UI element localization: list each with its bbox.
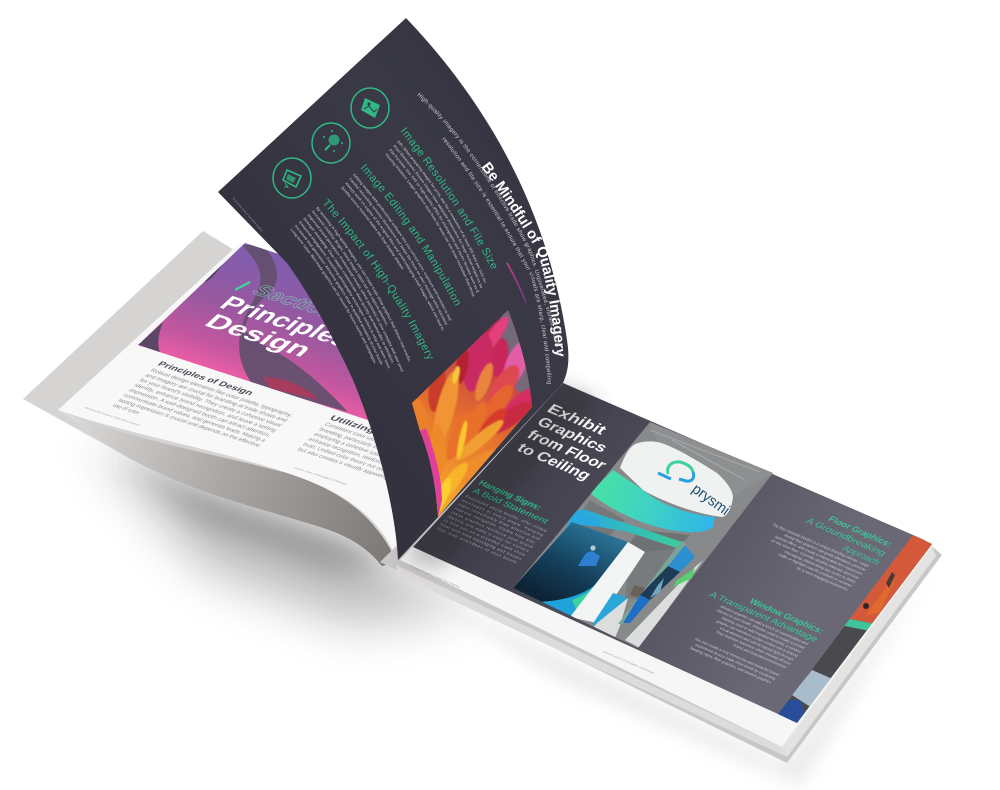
footer: left page: [83, 406, 349, 486]
green floor accent: [673, 568, 695, 587]
title: exhibit graphics: to Ceiling: [513, 440, 595, 483]
heading: floor graphics: Approach: [840, 544, 882, 566]
back wall: [625, 548, 678, 600]
page stack: left: [58, 410, 397, 566]
body: image editing: Quality source material makes the final display sharper.: [342, 186, 404, 270]
store photo: exhibit booth: [513, 422, 773, 648]
section title: Design: [199, 310, 318, 361]
section label: Section: [247, 281, 344, 323]
blue counter: [592, 593, 627, 625]
curled sheet: [218, 18, 568, 560]
book cover: right board: [380, 385, 942, 763]
body: principles of design: for your brand's visibility. They create a cohesive visual: [138, 378, 283, 428]
body: utilizing color: but also creates a visually appealing and: [296, 447, 401, 484]
icon: monitor: [273, 158, 311, 198]
footer: right page: The Essential Guide to Trade Show Graphics: [408, 564, 462, 589]
heading: hanging signs: Hanging Signs:: [477, 478, 544, 512]
body: hanging signs: [436, 494, 549, 565]
heading: hanging signs: [471, 478, 552, 526]
body: principles of design: use of color.: [111, 403, 142, 416]
footer: curled page: The Essential Guide to Trade Show Graphics: [231, 196, 264, 233]
dark colour panel: [413, 383, 913, 714]
body: principles of design: communicate brand values, and generate leads. Making a: [122, 393, 267, 443]
body: utilizing color: Consistent color usage is essential for effective: [323, 422, 444, 465]
pink accent rule: [507, 263, 526, 303]
body: window graphics: graphic can transform a plain surface into a striking: [715, 619, 799, 658]
intro paragraph: High-quality imagery is the cornerstone of effective trade show graphics. Unpixelated, vibrant visuals attract attendees and: [417, 92, 562, 355]
teal arch band: [590, 470, 715, 532]
heading: floor graphics: [804, 514, 894, 566]
body: floor graphics: for a more engaging experience.: [796, 566, 850, 592]
body: image resolution: DPI: When preparing images for print, aim for a resolution of at least 300 dots per inch for sharp results at close range.: [397, 140, 486, 282]
body: impact of imagery: Increased lead generation: Attractive graphics draw in qualified prospects at your booth.: [294, 224, 382, 366]
body: hanging signs: these graphics reinforce your brand: [450, 510, 534, 549]
page stack: right: [396, 565, 787, 757]
body: floor graphics: messaging, placed along key routes to direct: [783, 549, 858, 584]
icon: picture: [351, 88, 389, 128]
body: window graphics: meeting room or add branded elements, a window: [720, 616, 803, 654]
heading: impact of imagery: The Impact of High-Quality Imagery: [324, 198, 433, 359]
body: window graphics: brand and branded environments.: [732, 643, 789, 670]
panel: right page: [400, 383, 940, 747]
body: principles of design: and imagery are crucial for branding at trade shows and: [143, 373, 288, 423]
heading: hanging signs: A Bold Statement: [471, 486, 552, 526]
body: floor graphics: traffic or highlight specific products or services: [777, 552, 854, 588]
footer: right page: prysm.com | Principles of Design: [602, 650, 656, 675]
body: hanging signs: improve navigation. Visible from afar,: [454, 506, 538, 545]
body: utilizing color: branding, particularly in trade shows. By: [317, 427, 421, 464]
panel: curled page: [218, 18, 568, 560]
soft shadow cast by curled page: [400, 383, 600, 570]
heading: floor graphics: Floor Graphics:: [826, 514, 894, 548]
logo wordmark: prysmi: [689, 480, 733, 519]
section title: Principles of: [214, 292, 392, 362]
body: window graphics: experience at your trade show booth by combining: [694, 642, 777, 681]
body: floor graphics: [770, 522, 871, 592]
title: exhibit graphics: [513, 401, 611, 483]
body: principles of design: lasting impression is crucial and depends on the effective: [116, 398, 262, 448]
body: impact of imagery: By investing in high-quality imagery, you can create trade show graphics that deliver real results:: [316, 206, 410, 362]
body: floor graphics: special offers, and create a memorable first impression: [774, 534, 864, 576]
body: floor graphics: on the show floor. Consider durable materials and clear: [770, 538, 861, 580]
right booth panel: [668, 545, 695, 572]
heading: window graphics: Window Graphics:: [747, 597, 826, 635]
intro paragraph: resolution and file size is essential to ensure that your visuals are sharp, clear and compelling at any size.: [442, 137, 552, 384]
body: window graphics: interest to your booth. Whether used to create a private: [716, 608, 806, 650]
body: hanging signs: messages at every angle. Hanging: [461, 498, 545, 537]
intro paragraph: [417, 92, 562, 384]
body: window graphics: Window graphics can add a touch of sophistication and: [719, 604, 810, 646]
book cover: left board: [23, 231, 420, 566]
white page sheet: [58, 243, 420, 560]
title: exhibit graphics: from Floor: [523, 427, 610, 473]
body: principles of design: identity, enhance brand recognition, and leave a lasting: [132, 383, 277, 433]
booth post: [620, 542, 685, 623]
body: hanging signs: signs immediately draw attention and: [457, 502, 541, 541]
heading: principles of design: Principles of Design: [156, 360, 256, 397]
body: window graphics: You can create a truly immersive and impactful brand: [693, 637, 781, 677]
drop shadow under book: [90, 440, 930, 785]
dark swirl shape: [239, 245, 348, 412]
panel: left page: [58, 243, 396, 550]
body: utilizing color: [296, 422, 444, 484]
icon: magnifier: [312, 123, 350, 163]
heading: image resolution: Image Resolution and File Size: [400, 127, 496, 269]
body: hanging signs: to find you on a crowded trade show: [443, 518, 527, 557]
photo: flower: [412, 310, 532, 517]
body: window graphics: They maintain openness while showing off your: [714, 629, 793, 666]
body: impact of imagery: Long-term value: Well-made graphics can be reused for future events and campaigns.: [290, 228, 376, 364]
body: principles of design: [111, 368, 294, 448]
body: window graphics: visual element and still let natural light through.: [719, 626, 796, 662]
body: principles of design: impression. A well-designed booth can attract attention,: [127, 388, 272, 438]
body: utilizing color: enhance recognition, reinforce their identity and: [306, 437, 429, 480]
body: window graphics: [689, 604, 810, 685]
booth top frame: [572, 509, 685, 548]
logo mark: [658, 462, 694, 481]
photo strip: orange vehicle and window: [778, 535, 932, 723]
wave graphic: [541, 585, 595, 616]
pink strip beside flower: [420, 428, 442, 517]
body: image editing: Editing images with professional software lets you correct color, exposure and contrast to match brand standards at print size.: [353, 174, 452, 321]
footer: left page: The Essential Guide to Trade Show Graphics: [83, 406, 142, 427]
body: impact of imagery: Enhanced engagement: Compelling photography encourages visitors to stop and learn more.: [299, 221, 390, 370]
title: exhibit graphics: Graphics: [533, 414, 611, 456]
body: hanging signs: identity and make it easy for visitors: [446, 514, 530, 553]
body: hanging signs: Positioned above booths, offer visible: [464, 494, 549, 533]
body: impact of imagery: Increased visibility: Bright, sharp images stand out and capture attention.: [312, 210, 388, 326]
white page sheet: [400, 383, 932, 747]
heading: window graphics: A Transparent Advantage: [707, 590, 820, 643]
blue poster wall: [513, 522, 628, 617]
floor: [625, 560, 703, 648]
body: floor graphics: format floor graphics can guide attendees, promote: [783, 533, 867, 572]
heading: floor graphics: A Groundbreaking: [804, 516, 888, 557]
body: impact of imagery: Stronger messaging: Clear images communicate ideas quickly and memorably to attendees.: [304, 218, 394, 364]
footer: right page: [408, 564, 656, 675]
body: utilizing color: employing a cohesive color palette, brands: [312, 432, 422, 471]
body: hanging signs: floor with bold messaging and visuals: [439, 522, 523, 561]
white arch sign: [620, 441, 733, 517]
body: window graphics: hanging signs, floor graphics, and window graphics.: [689, 646, 774, 685]
body: hanging signs: that lead attendees to your booth.: [436, 526, 520, 565]
heading: utilizing color: Utilizing Color: [328, 414, 412, 445]
title: exhibit graphics: Exhibit: [543, 401, 610, 438]
page title: Be Mindful of Quality Imagery: [482, 162, 564, 356]
body: floor graphics: The floor beneath booths is a unique branding canvas. Large: [771, 522, 871, 568]
heading: image editing: Image Editing and Manipulation: [360, 164, 460, 306]
poster person: [578, 551, 600, 566]
body: principles of design: Robust design elements like color palette, typography,: [149, 368, 294, 418]
body: utilizing color: trust. Unified color theory not only aids in this: [301, 442, 417, 483]
section image with gradient: [138, 243, 368, 420]
white column: [570, 542, 645, 623]
footer: left page: prysm.com | Principles of Design: [293, 466, 349, 486]
